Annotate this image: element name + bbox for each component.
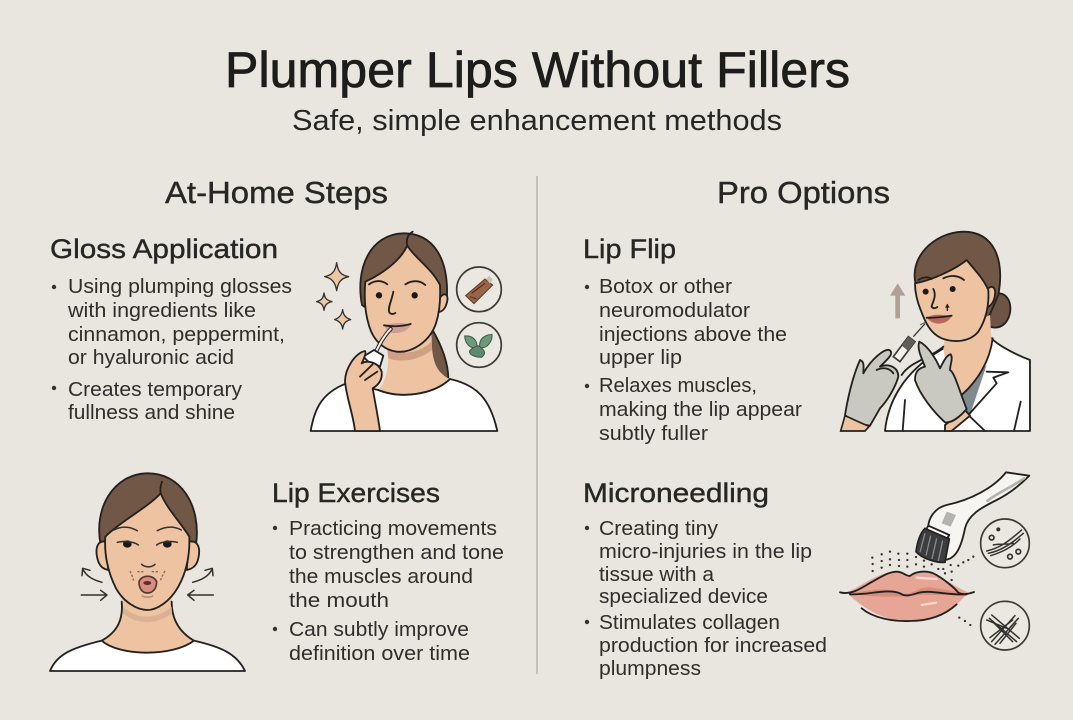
column heading: At-Home Steps: At-Home Steps <box>165 175 388 210</box>
text block: microneedling bullets: micro-injuries in the lip <box>599 540 812 563</box>
icon: peppermint leaves <box>457 323 501 367</box>
text block: gloss bullets: Using plumping glosses <box>68 275 292 298</box>
text block: exercise bullets: Can subtly improve <box>289 618 469 641</box>
text block: exercise bullets: Practicing movements <box>289 517 497 540</box>
text block: exercise bullets: to strengthen and tone <box>289 541 504 564</box>
heading: Lip Exercises: Lip Exercises <box>272 478 440 508</box>
illustration: derma roller and lips <box>840 472 1029 650</box>
text block: gloss bullets: cinnamon, peppermint, <box>68 323 285 346</box>
text block: exercise bullets: the muscles around <box>289 565 473 588</box>
text block: gloss bullets: with ingredients like <box>67 299 256 322</box>
panel: microneedling <box>583 472 1029 680</box>
icon: collagen strands <box>981 519 1029 568</box>
text block: microneedling bullets <box>585 517 827 680</box>
illustration: woman doing lip exercise <box>50 473 245 671</box>
text block: lip flip bullets: Relaxes muscles, <box>599 374 757 397</box>
text block: exercise bullets: definition over time <box>289 642 470 665</box>
icon: syringe <box>893 324 925 362</box>
icon: derma roller <box>916 472 1029 562</box>
heading: Microneedling: Microneedling <box>583 478 769 508</box>
column heading: Pro Options: Pro Options <box>717 175 890 210</box>
heading: Lip Flip: Lip Flip <box>583 234 676 264</box>
title: Plumper Lips Without Fillers <box>225 42 850 98</box>
text block: lip flip bullets: subtly fuller <box>599 422 708 445</box>
text block: gloss bullets: or hyaluronic acid <box>68 346 234 369</box>
dots: micro-punctures <box>871 550 974 626</box>
text block: microneedling bullets: Stimulates collagen <box>599 611 780 634</box>
icon: arrows around face <box>81 568 213 600</box>
text block: lip flip bullets: neuromodulator <box>599 299 750 322</box>
panel: lip flip <box>583 232 1030 445</box>
text block: gloss bullets <box>52 275 292 424</box>
icon: cinnamon stick <box>457 267 501 312</box>
panel: gloss application <box>50 232 501 431</box>
text block: microneedling bullets: specialized device <box>599 585 768 608</box>
text block: exercise bullets: the mouth <box>289 589 389 612</box>
heading: Gloss Application: Gloss Application <box>50 234 278 264</box>
text block: gloss bullets: Creates temporary <box>68 378 243 401</box>
text block: microneedling bullets: tissue with a <box>599 563 715 586</box>
text block: exercise bullets <box>273 517 504 665</box>
illustration: practitioner with syringe <box>841 232 1030 431</box>
illustration: woman applying gloss <box>311 232 501 431</box>
icon: crossed collagen fibres <box>981 601 1029 650</box>
text block: gloss bullets: fullness and shine <box>68 401 235 424</box>
subtitle: Safe, simple enhancement methods <box>292 105 782 137</box>
text block: microneedling bullets: plumpness <box>599 657 701 680</box>
icon: lips <box>840 572 974 621</box>
text block: lip flip bullets: upper lip <box>599 346 682 369</box>
text block: microneedling bullets: Creating tiny <box>599 517 719 540</box>
text block: lip flip bullets: making the lip appear <box>599 398 802 421</box>
text block: lip flip bullets <box>585 275 802 445</box>
text block: lip flip bullets: injections above the <box>599 323 787 346</box>
icon: up arrow <box>890 283 905 318</box>
icon: sparkles <box>317 263 351 329</box>
text block: lip flip bullets: Botox or other <box>599 275 732 298</box>
text block: microneedling bullets: production for increased <box>599 634 827 657</box>
panel: lip exercises <box>50 473 504 671</box>
